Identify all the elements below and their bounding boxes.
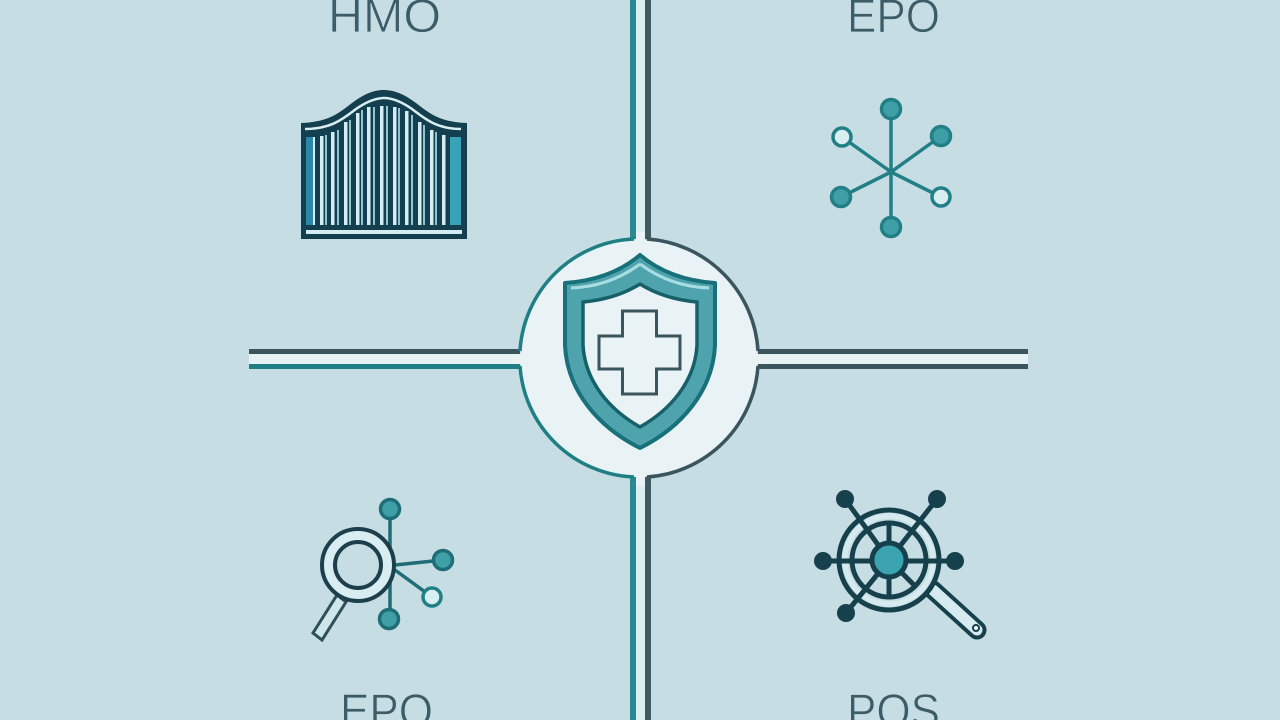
lower left node — [832, 188, 850, 206]
upper right node — [932, 126, 950, 146]
connector: left horizontal lines — [249, 349, 521, 369]
connector: top vertical lines — [630, 0, 651, 240]
icon: star network — [832, 100, 950, 236]
connector: bottom vertical lines — [630, 476, 651, 720]
icon: ship wheel magnifier — [814, 490, 979, 631]
icon: shield with medical cross — [565, 255, 715, 448]
icon: magnifier with network nodes — [313, 500, 452, 640]
upper left hollow node — [833, 128, 851, 146]
lower right hollow node — [932, 188, 950, 206]
wheel hub — [872, 543, 906, 577]
icon: gate — [301, 90, 467, 239]
bottom node — [882, 218, 900, 236]
top node — [882, 100, 900, 118]
icon: medical cross — [599, 311, 680, 394]
central hub circle — [512, 232, 766, 486]
connector: right horizontal lines — [757, 349, 1028, 369]
